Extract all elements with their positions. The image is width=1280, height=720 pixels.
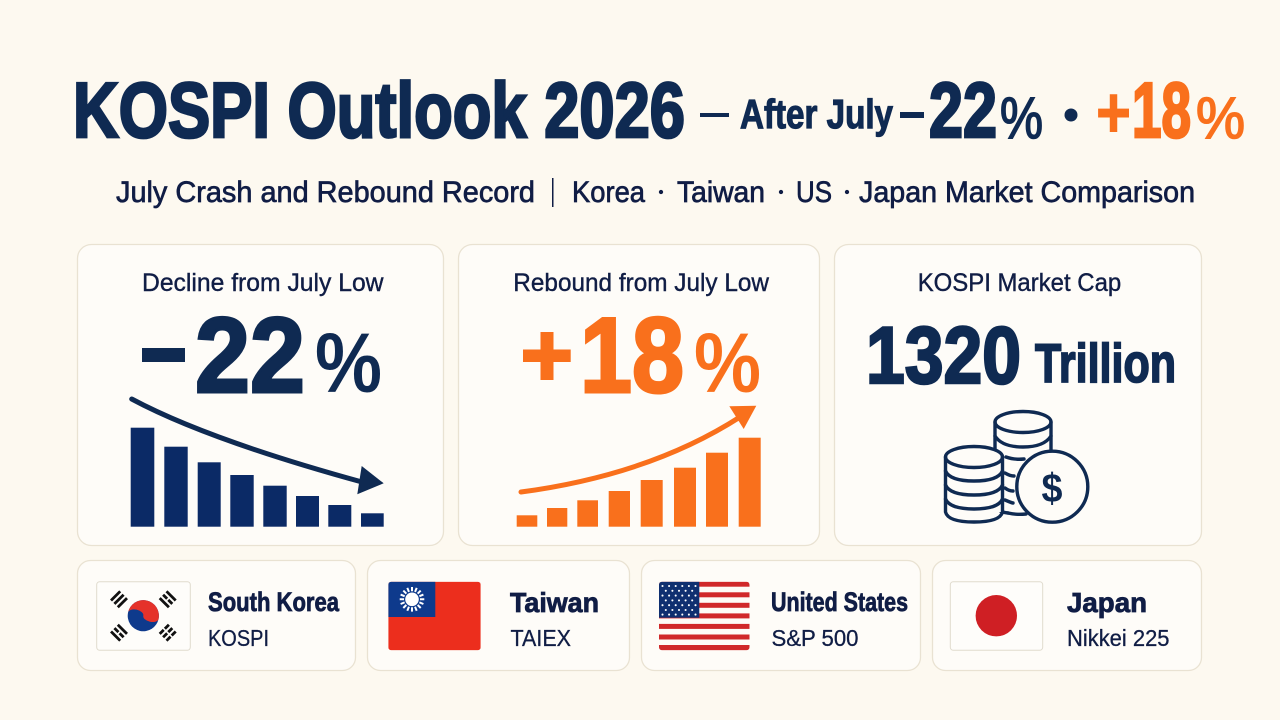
label: United States S&P 500: United States [771, 587, 908, 617]
label: United States S&P 500 [771, 587, 908, 651]
arrow: upward trend [521, 406, 756, 492]
panel: United States [642, 560, 920, 670]
icon: Taiwan flag [388, 582, 481, 650]
title: KOSPI Outlook 2026 [73, 66, 685, 154]
panel: South Korea [78, 560, 356, 670]
big number: 1320 Trillion [866, 311, 1176, 401]
big number: 1320 Trillion: Trillion [1035, 332, 1176, 394]
title: + [1096, 73, 1131, 153]
label: Taiwan TAIEX: TAIEX [510, 625, 571, 651]
subtitle [116, 176, 1195, 209]
title: 22 [929, 66, 997, 154]
title: % [1000, 86, 1043, 151]
subtitle: July Crash and Rebound Record [116, 176, 535, 209]
label: Japan Nikkei 225 [1067, 587, 1170, 651]
big number: 1320 Trillion: 1320 [866, 311, 1021, 401]
big number: -22%: 22 [195, 295, 305, 415]
label: Taiwan TAIEX [510, 587, 599, 651]
panel heading: rebound: Rebound from July Low [513, 269, 770, 297]
subtitle: Korea [572, 176, 645, 209]
subtitle: Taiwan [677, 176, 765, 209]
panel: Taiwan [368, 560, 630, 670]
label: Taiwan TAIEX: Taiwan [510, 587, 599, 618]
label: Japan Nikkei 225: Japan [1067, 587, 1147, 618]
big number: +18%: 18 [580, 295, 684, 415]
big number: -22%: % [315, 316, 382, 410]
big number: -22% [142, 295, 382, 415]
panel: KOSPI market cap [834, 244, 1202, 546]
label: United States S&P 500: S&P 500 [772, 625, 858, 651]
label: South Korea KOSPI [208, 587, 340, 651]
title: 18 [1132, 66, 1191, 154]
infographic canvas [76, 79, 1244, 671]
title: % [1196, 86, 1245, 151]
label: South Korea KOSPI: KOSPI [208, 625, 269, 651]
bar chart: rising bars [517, 438, 761, 527]
icon: Japan flag [950, 582, 1043, 650]
label: Japan Nikkei 225: Nikkei 225 [1067, 625, 1170, 651]
icon: coin stacks with dollar coin [946, 412, 1088, 522]
arrow: downward trend [132, 399, 384, 494]
icon: United States flag [659, 582, 750, 650]
panel heading: decline: Decline from July Low [142, 269, 384, 297]
label: South Korea KOSPI: South Korea [208, 587, 340, 617]
title [73, 66, 1245, 154]
panel: Japan [932, 560, 1202, 670]
bar chart: falling bars [131, 428, 384, 527]
subtitle: US [796, 176, 832, 209]
icon: coin stacks with dollar coin: $ [1042, 465, 1063, 511]
panel heading: market cap: KOSPI Market Cap [918, 269, 1121, 297]
title: After July [740, 91, 893, 137]
subtitle: Japan Market Comparison [859, 176, 1195, 209]
panel: decline from July low [78, 244, 444, 546]
icon: South Korea flag [97, 582, 190, 650]
big number: +18% [523, 295, 761, 415]
panel: rebound from July low [458, 244, 820, 546]
big number: +18%: % [694, 316, 761, 410]
